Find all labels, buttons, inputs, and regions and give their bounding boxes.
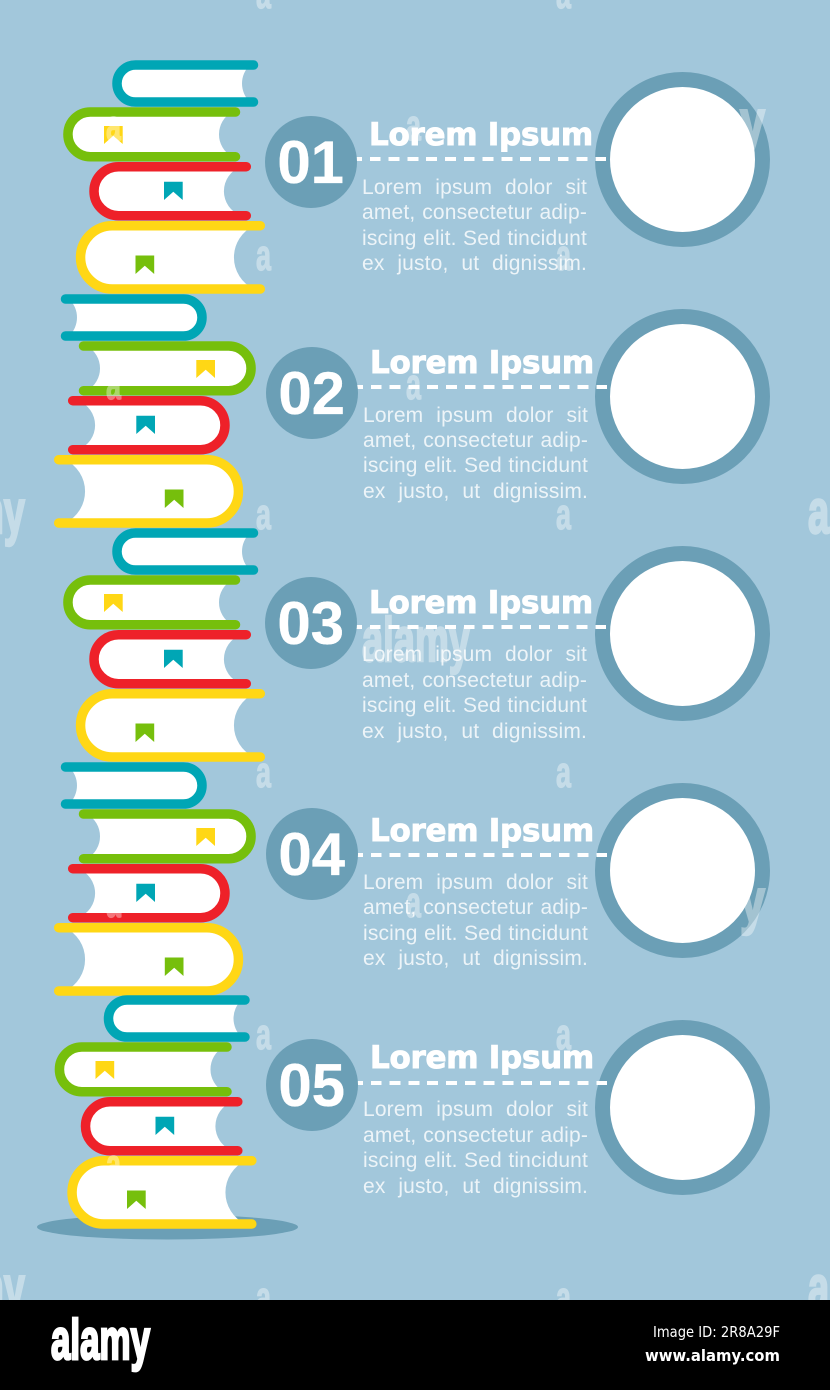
number badge 01 [265, 116, 357, 208]
book: teal [117, 533, 254, 570]
body text: amet, consectetur adip- [362, 669, 587, 692]
watermark marks: a [556, 231, 571, 280]
heading: Lorem Ipsum [369, 584, 593, 620]
image placeholder circle [594, 782, 770, 958]
book: yellow [81, 694, 260, 757]
book: red [94, 635, 246, 684]
watermark marks: a [106, 360, 121, 409]
book: yellow [59, 460, 238, 523]
book: red [73, 869, 225, 918]
body text: iscing elit. Sed tincidunt [363, 454, 588, 477]
body text [362, 643, 587, 743]
book: teal [66, 767, 202, 804]
watermark marks: y [740, 867, 765, 936]
panel: step 01 [265, 72, 770, 275]
body text [362, 176, 587, 275]
body text [363, 1098, 588, 1198]
body text: iscing elit. Sed tincidunt [362, 694, 587, 717]
body text: iscing elit. Sed tincidunt [363, 1149, 588, 1172]
book: yellow [81, 226, 260, 289]
body text: ex justo, ut dignissim. [363, 480, 588, 503]
website: www.alamy.com [645, 1346, 780, 1365]
body text: ex justo, ut dignissim. [362, 252, 587, 275]
footer logo: alamy [51, 1308, 150, 1372]
panel: step 03 [265, 546, 770, 743]
body text: ex justo, ut dignissim. [363, 1175, 588, 1198]
body text: amet, consectetur adip- [363, 896, 588, 919]
body text: Lorem ipsum dolor sit [363, 1098, 588, 1121]
book: green [84, 814, 251, 859]
panel: step 04 [266, 783, 770, 970]
watermark marks: a [556, 748, 571, 797]
dashed connector [352, 853, 607, 857]
book: yellow [72, 1161, 252, 1224]
heading: Lorem Ipsum [370, 344, 594, 380]
book: red [86, 1102, 238, 1151]
dashed connector [351, 625, 606, 629]
number badge 01: 01 [277, 129, 344, 196]
dashed connector [352, 1081, 607, 1085]
heading: Lorem Ipsum [370, 1040, 594, 1076]
watermark marks: a [256, 1010, 271, 1059]
watermark marks: a [556, 1010, 571, 1059]
number badge 05: 05 [278, 1052, 345, 1119]
book: green [84, 346, 251, 391]
panel: step 02 [266, 309, 770, 503]
body text: Lorem ipsum dolor sit [362, 176, 587, 199]
book: green [59, 1047, 227, 1092]
body text: ex justo, ut dignissim. [363, 947, 588, 970]
body text: ex justo, ut dignissim. [362, 720, 587, 743]
number badge 03 [265, 577, 357, 669]
footer bar [0, 1300, 830, 1390]
image placeholder circle [594, 72, 770, 246]
book: red [73, 401, 225, 450]
book: teal [109, 1000, 245, 1037]
watermark marks: a [106, 101, 121, 150]
body text: Lorem ipsum dolor sit [362, 643, 587, 666]
body text: iscing elit. Sed tincidunt [363, 922, 588, 945]
book: red [94, 167, 246, 216]
book group 5 [59, 1000, 252, 1224]
watermark marks: a [406, 878, 421, 927]
image placeholder circle [594, 308, 770, 484]
image placeholder circle [594, 1020, 770, 1194]
dashed connector [351, 157, 606, 161]
body text [363, 404, 588, 503]
number badge 02 [266, 347, 358, 439]
panel: step 05 [266, 1020, 770, 1198]
dashed connector [352, 385, 607, 389]
watermark marks: a [256, 490, 271, 539]
body text: amet, consectetur adip- [363, 429, 588, 452]
book group 1 [68, 65, 260, 289]
watermark marks: a [256, 748, 271, 797]
number badge 04 [266, 808, 358, 900]
body text: Lorem ipsum dolor sit [363, 871, 588, 894]
watermark marks: a [256, 231, 271, 280]
number badge 02: 02 [278, 360, 345, 427]
watermark marks: a [106, 878, 121, 927]
body text [363, 871, 588, 970]
book: yellow [59, 928, 238, 991]
image placeholder circle [594, 546, 770, 720]
watermark marks: a [406, 360, 421, 409]
number badge 03: 03 [277, 590, 344, 657]
heading: Lorem Ipsum [369, 116, 593, 152]
image id: Image ID: 2R8A29F [653, 1323, 780, 1341]
body text: amet, consectetur adip- [363, 1124, 588, 1147]
book: green [68, 112, 235, 157]
body text: iscing elit. Sed tincidunt [362, 227, 587, 250]
book group 2 [59, 299, 251, 523]
book group 4 [59, 767, 251, 991]
book: green [68, 580, 235, 625]
book: teal [66, 299, 202, 336]
body text: amet, consectetur adip- [362, 201, 587, 224]
watermark marks: a [106, 1140, 121, 1189]
book stack shadow [37, 1214, 298, 1240]
number badge 04: 04 [278, 821, 345, 888]
watermark marks: a [556, 490, 571, 539]
body text: Lorem ipsum dolor sit [363, 404, 588, 426]
number badge 05 [266, 1039, 358, 1131]
heading: Lorem Ipsum [370, 812, 594, 848]
watermark marks: alamy [362, 606, 470, 675]
book: teal [117, 65, 254, 102]
book group 3 [68, 533, 260, 757]
watermark marks: a [406, 101, 421, 150]
watermark marks: y [740, 88, 765, 157]
